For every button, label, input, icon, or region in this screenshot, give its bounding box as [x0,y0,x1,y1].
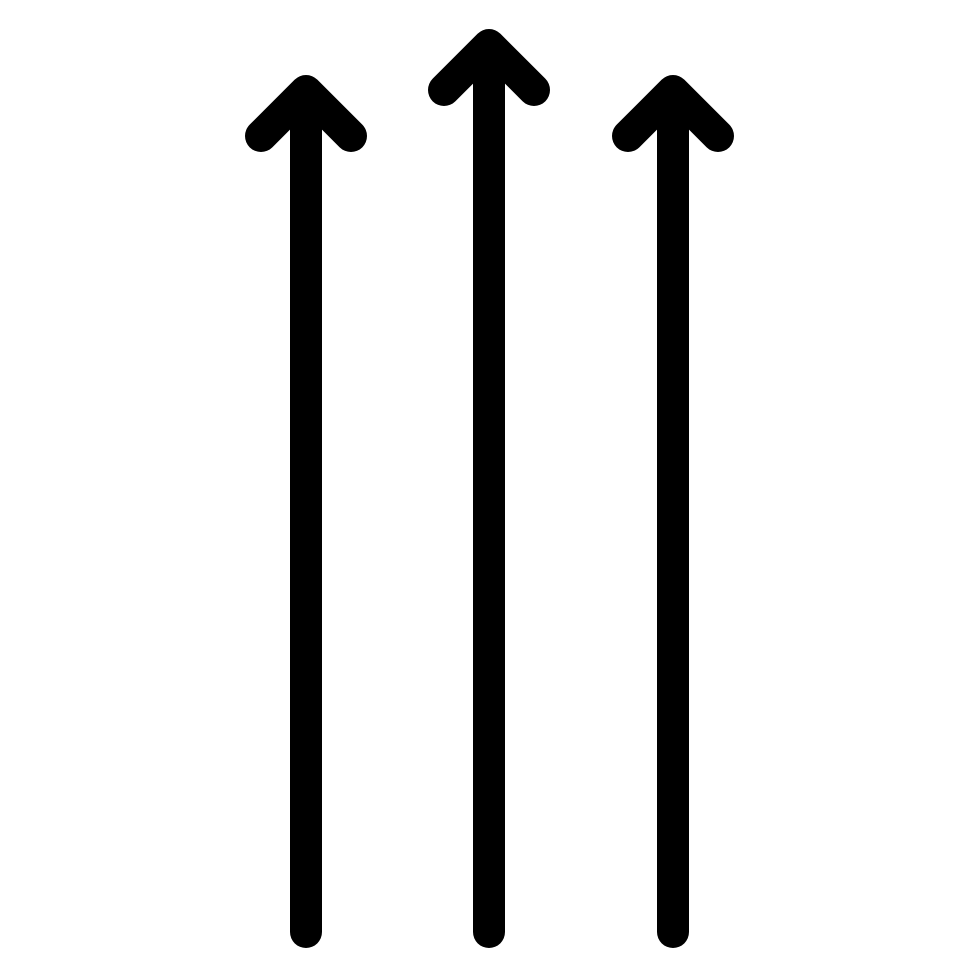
arrow: right [628,91,718,932]
arrow: middle [444,45,534,932]
arrow: left [261,91,351,932]
